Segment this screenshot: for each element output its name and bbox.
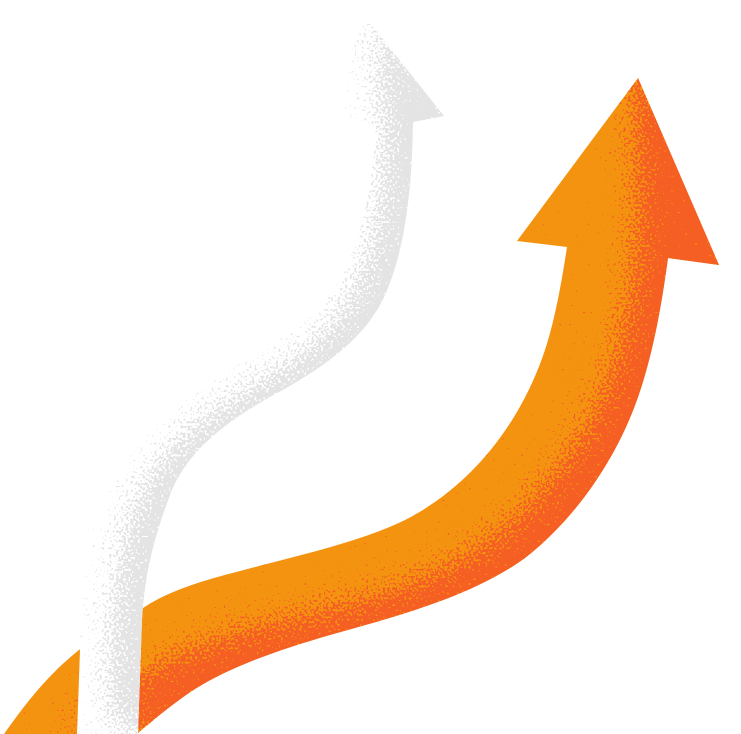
grey arrow white base shape bbox=[77, 18, 444, 734]
icon: grey rising arrow bbox=[77, 24, 444, 734]
grey arrow speckled fill bbox=[110, 5, 480, 734]
